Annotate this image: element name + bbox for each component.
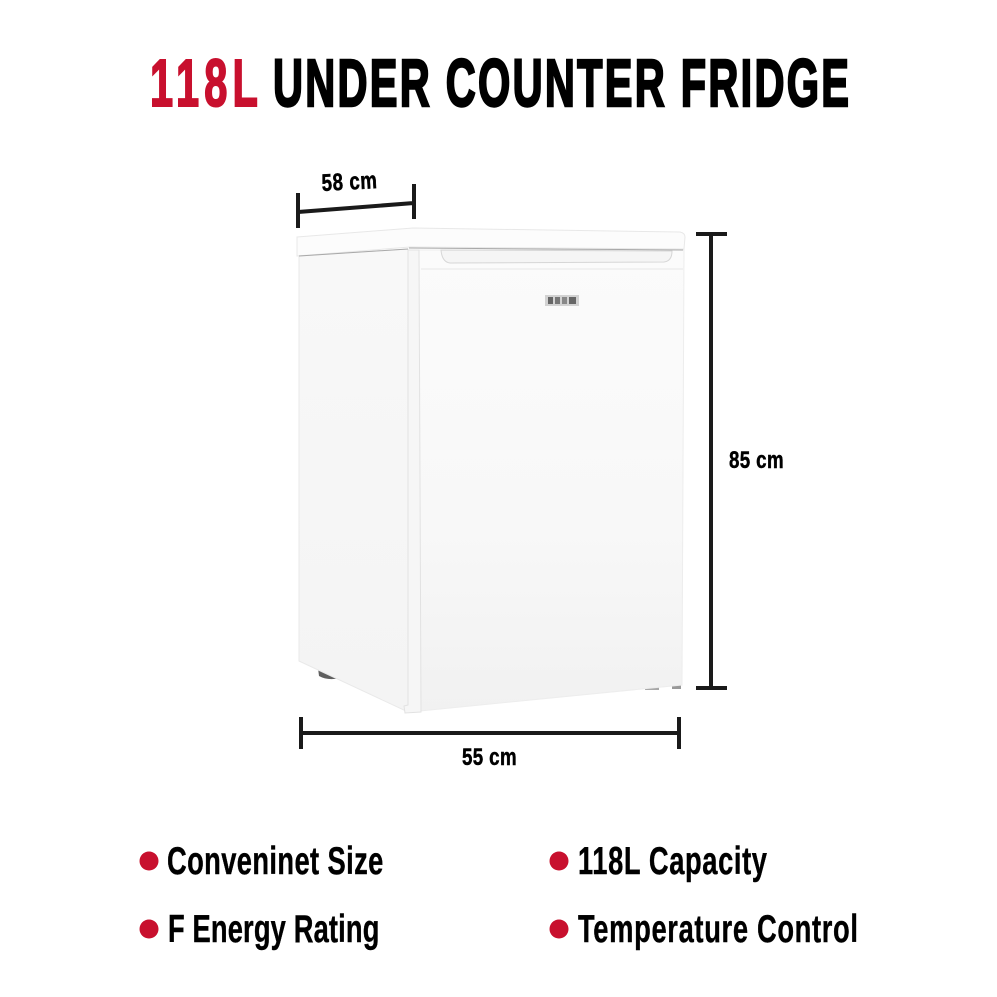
top shadow line xyxy=(299,248,683,256)
side panel xyxy=(299,249,408,712)
title: UNDER COUNTER FRIDGE xyxy=(273,46,849,120)
feature: 118L capacity: 118L Capacity xyxy=(578,840,767,883)
dimension: width 55 cm: 55 cm xyxy=(462,744,517,771)
feature: F energy rating: F Energy Rating xyxy=(168,908,379,951)
dimension: height 85 cm: 85 cm xyxy=(729,447,784,474)
feature: temperature control: Temperature Control xyxy=(578,908,858,951)
dimension: depth 58 cm xyxy=(298,167,414,228)
door upper band xyxy=(421,268,683,270)
dimension: depth 58 cm: 58 cm xyxy=(321,167,378,197)
door xyxy=(409,250,684,711)
feature: convenient size: Conveninet Size xyxy=(167,840,383,883)
dimension: width 55 cm xyxy=(301,717,679,771)
handle xyxy=(441,250,672,263)
brand badge xyxy=(545,295,579,306)
fridge illustration xyxy=(297,228,685,713)
top panel xyxy=(297,228,685,256)
door hinge strip xyxy=(404,250,421,713)
feet xyxy=(318,668,681,690)
dimension: height 85 cm xyxy=(696,234,784,688)
title: 118L xyxy=(150,46,258,120)
